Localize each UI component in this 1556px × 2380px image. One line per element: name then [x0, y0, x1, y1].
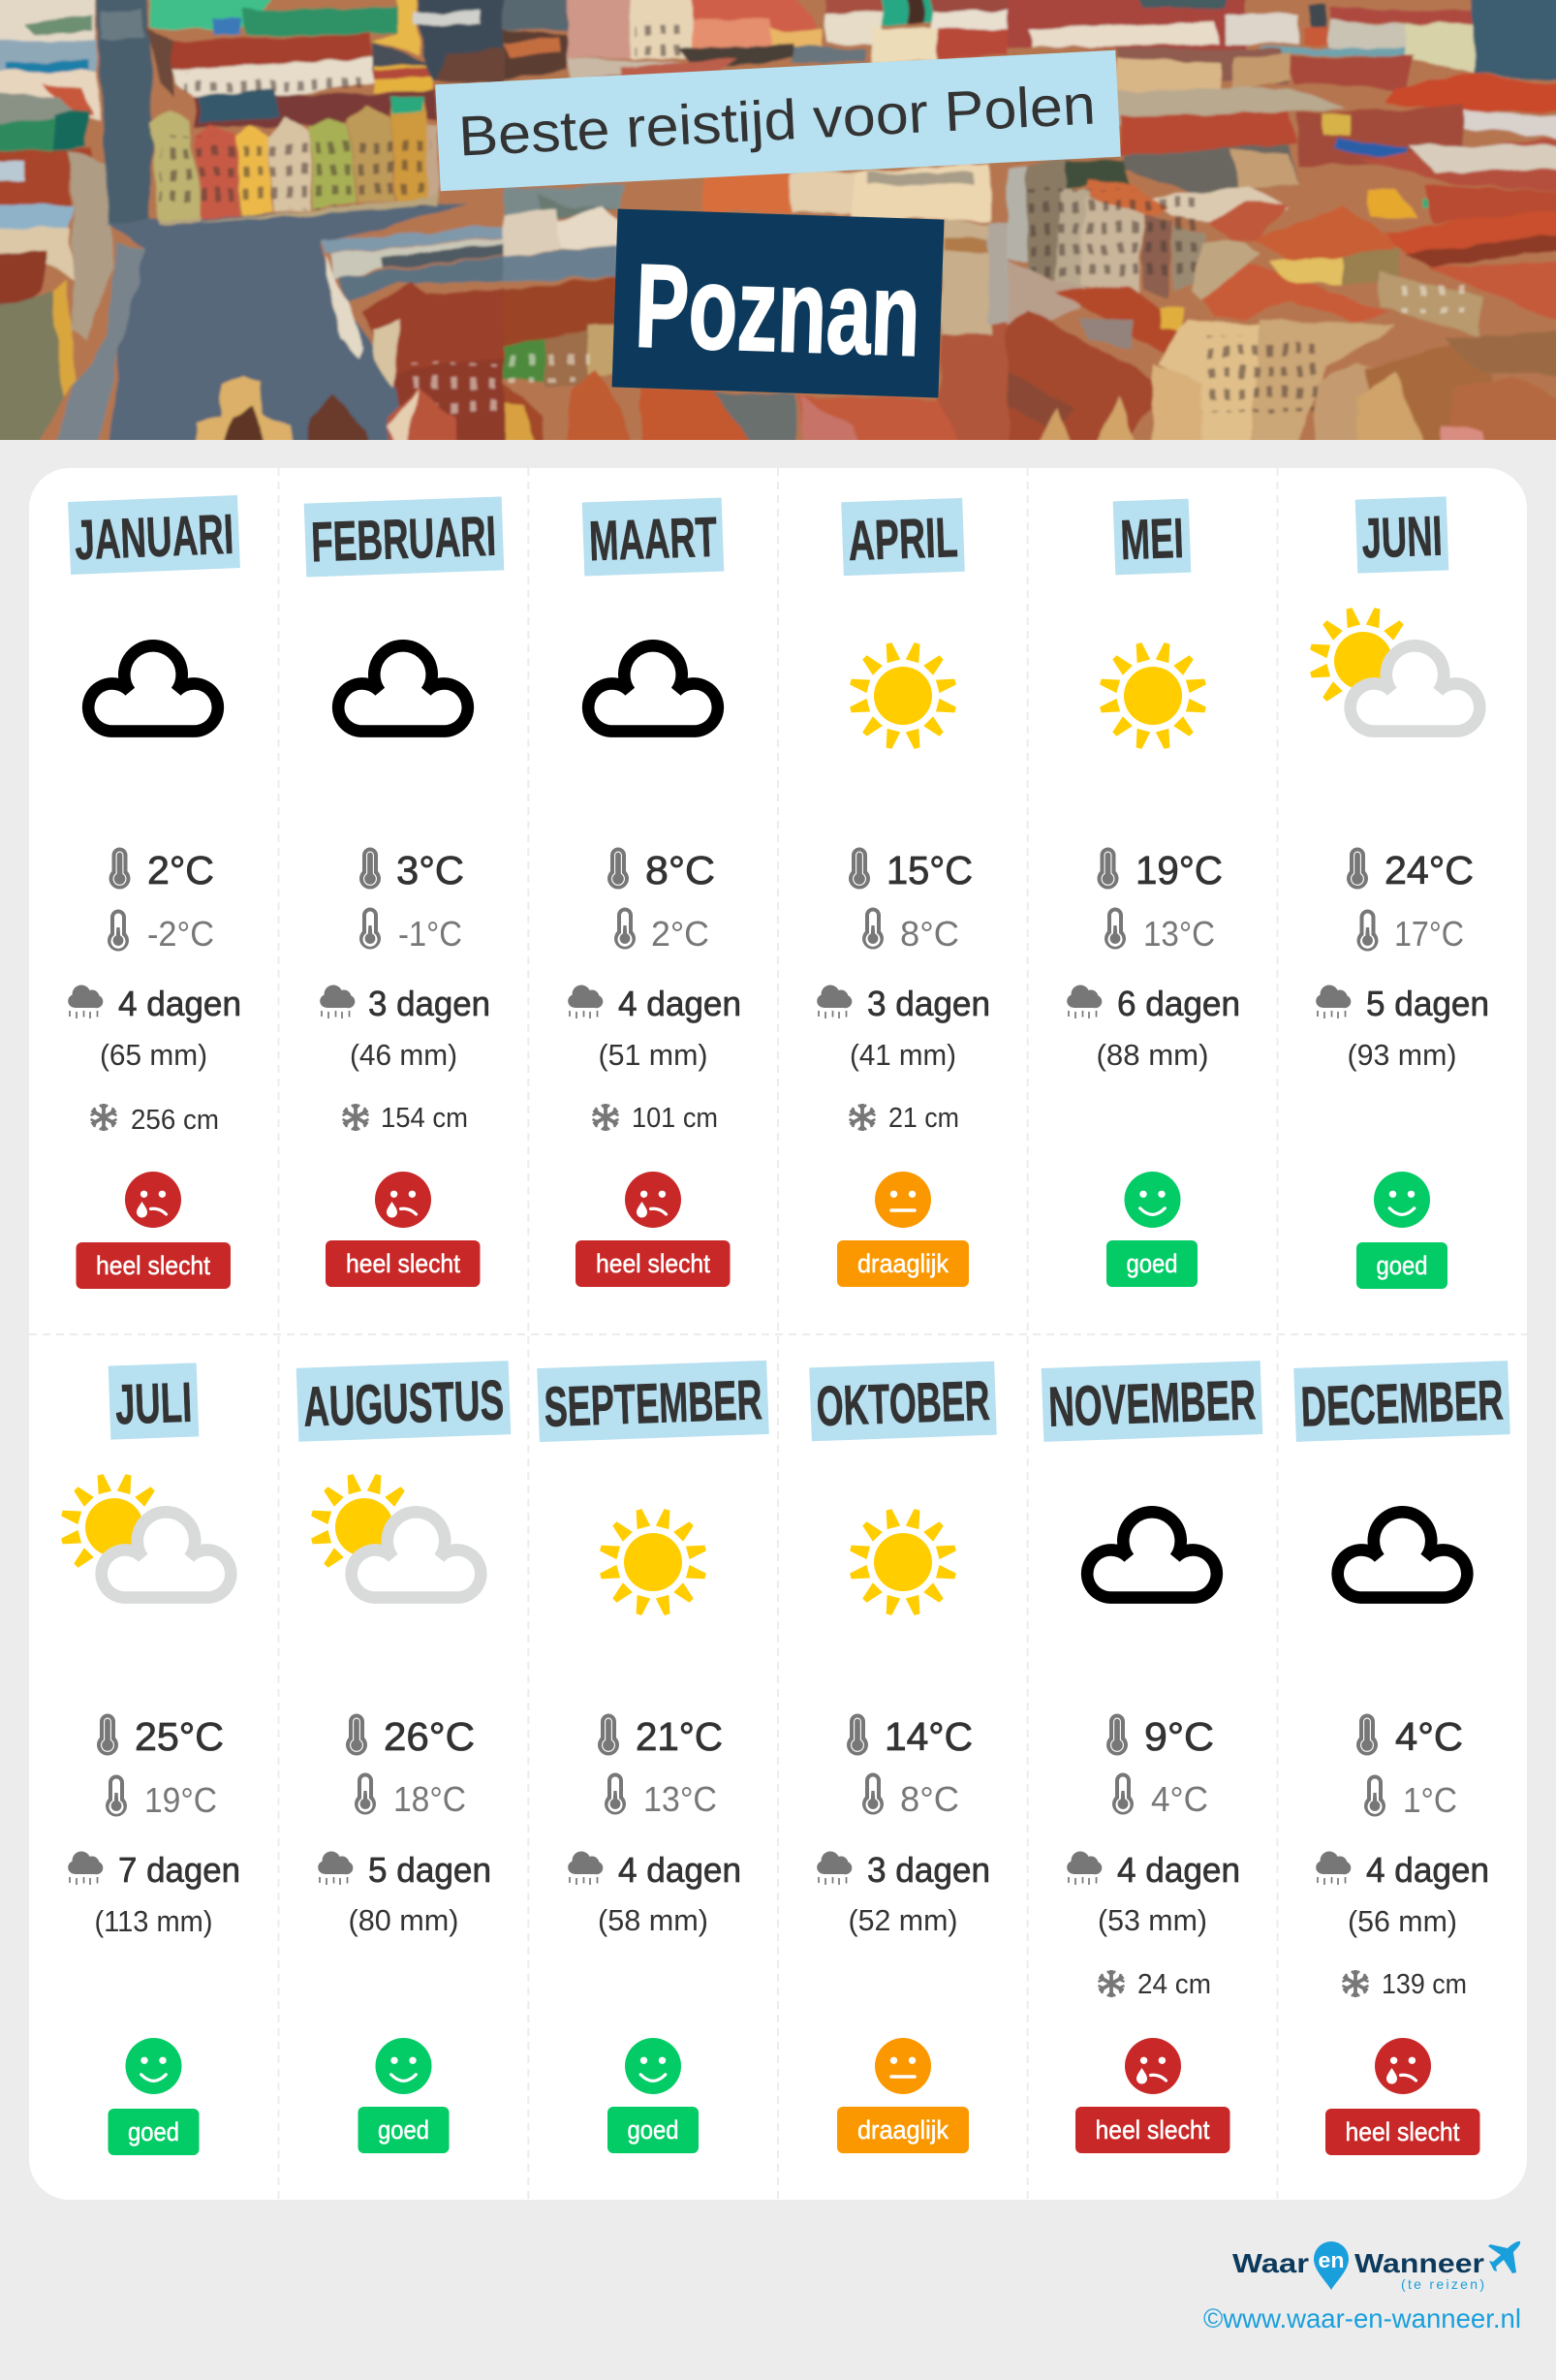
rain days: [1316, 984, 1489, 1023]
snow: [593, 1103, 718, 1134]
rating label: goed: [128, 2117, 179, 2146]
low temperature: [614, 907, 709, 954]
month label: april: [841, 498, 965, 576]
low temperature: 8°C: [900, 914, 959, 954]
month label: januari: JANUARI: [74, 503, 234, 572]
low temperature: [355, 1773, 466, 1819]
second row of months: [60, 1361, 1510, 2155]
rating label: [358, 2107, 450, 2153]
logo: Waar en Wanneer: Waar: [1232, 2248, 1309, 2278]
rain days: 4 dagen: [118, 984, 241, 1023]
high temperature: 9°C: [1144, 1714, 1214, 1759]
rating label: [109, 2109, 200, 2155]
rain amount: (58 mm): [598, 1903, 708, 1937]
rating label: [607, 2107, 699, 2153]
high temperature: 24°C: [1385, 848, 1474, 892]
high temperature: [607, 847, 715, 892]
low temperature: [1364, 1775, 1457, 1820]
icon: partly cloudy: [1309, 607, 1479, 732]
rating face: [875, 1172, 931, 1228]
website url: ©www.waar-en-wanneer.nl: [1203, 2303, 1521, 2333]
month label: oktober: OKTOBER: [816, 1369, 991, 1438]
low temperature: -1°C: [398, 914, 462, 954]
hero photo: aerial view of Poznan old town: [0, 0, 1556, 470]
panel: april: [817, 498, 990, 1287]
month label: mei: [1113, 499, 1191, 575]
rain days: [1316, 1850, 1489, 1890]
icon: cloud: [1087, 1512, 1217, 1598]
icon: map pin: en: [1318, 2248, 1345, 2272]
rating label: heel slecht: [1345, 2117, 1460, 2146]
rain days: [318, 1850, 491, 1890]
rating face: [375, 1172, 431, 1228]
month label: juli: JULI: [114, 1371, 193, 1436]
low temperature: 4°C: [1151, 1779, 1208, 1819]
white calendar card: [29, 468, 1527, 2200]
panel: december: [1293, 1361, 1510, 2155]
icon: cloud: [1338, 1512, 1467, 1598]
icon: cloud: [88, 645, 218, 732]
rating face: [1374, 1172, 1430, 1228]
high temperature: 4°C: [1395, 1714, 1463, 1759]
icon: partly cloudy: [60, 1473, 231, 1598]
high temperature: [598, 1713, 723, 1759]
low temperature: 18°C: [393, 1779, 466, 1819]
high temperature: 14°C: [885, 1714, 973, 1759]
rain days: 4 dagen: [1366, 1850, 1489, 1890]
rating label: goed: [1126, 1249, 1178, 1278]
snow: 154 cm: [381, 1103, 468, 1134]
rating label: draaglijk: [857, 2115, 949, 2145]
rain days: [1067, 1850, 1240, 1890]
high temperature: [1347, 847, 1474, 892]
rating face: [125, 1172, 181, 1228]
month label: augustus: [296, 1361, 511, 1442]
logo: Waar en Wanneer: [1232, 2241, 1520, 2292]
high temperature: 15°C: [887, 848, 973, 892]
panel: november: [1042, 1361, 1262, 2153]
rain amount: (46 mm): [350, 1038, 457, 1072]
snow: [91, 1104, 219, 1136]
panel: juni: [1309, 496, 1489, 1289]
rating face: [376, 2038, 432, 2094]
rain amount: (88 mm): [1097, 1038, 1209, 1072]
low temperature: [359, 907, 462, 954]
low temperature: [1105, 907, 1215, 954]
snow: [849, 1103, 959, 1134]
low temperature: [862, 1773, 959, 1819]
month label: juni: JUNI: [1360, 505, 1444, 570]
month label: november: NOVEMBER: [1047, 1368, 1257, 1439]
rain amount: (93 mm): [1347, 1038, 1457, 1072]
rain days: [1067, 984, 1240, 1023]
icon: airplane: [1488, 2241, 1520, 2273]
rating face: [126, 2038, 182, 2094]
high temperature: 21°C: [636, 1714, 723, 1759]
snow: [1343, 1969, 1467, 2000]
rating label: [1325, 2109, 1480, 2155]
rating label: [1075, 2107, 1230, 2153]
low temperature: [108, 909, 214, 954]
month label: maart: MAART: [588, 506, 718, 573]
month label: september: [537, 1361, 769, 1442]
snow: 21 cm: [888, 1103, 959, 1134]
rating label: heel slecht: [596, 1249, 710, 1278]
rating label: heel slecht: [96, 1251, 210, 1280]
panel: maart: [568, 498, 741, 1287]
rating face: [1124, 1172, 1180, 1228]
rain amount: (52 mm): [849, 1903, 957, 1937]
rain days: 7 dagen: [118, 1850, 240, 1890]
rain days: [817, 1850, 990, 1890]
month label: juli: [109, 1362, 199, 1440]
month label: februari: FEBRUARI: [310, 505, 497, 574]
high temperature: [1106, 1713, 1214, 1759]
logo: Waar en Wanneer: (te reizen): [1401, 2276, 1484, 2292]
rating face: [1125, 2038, 1181, 2094]
low temperature: [605, 1773, 717, 1819]
month label: juni: [1355, 496, 1448, 574]
high temperature: [97, 1713, 224, 1759]
icon: partly cloudy: [310, 1473, 481, 1598]
month label: april: APRIL: [847, 506, 959, 573]
low temperature: [862, 907, 959, 954]
month label: november: [1042, 1361, 1262, 1442]
city name banner: Poznan: [612, 208, 944, 398]
low temperature: -2°C: [147, 914, 214, 954]
rain days: 6 dagen: [1117, 984, 1240, 1023]
rain days: [817, 984, 990, 1023]
rating label: [1356, 1242, 1447, 1289]
panel: februari: [304, 496, 504, 1287]
panel: augustus: [296, 1361, 511, 2153]
high temperature: 8°C: [645, 848, 715, 892]
rain days: [68, 984, 241, 1023]
rating label: heel slecht: [1095, 2115, 1210, 2145]
rating label: [326, 1240, 481, 1287]
rain amount: (51 mm): [599, 1038, 707, 1072]
panel: juli: [60, 1362, 240, 2155]
high temperature: [359, 847, 464, 892]
panel: januari: [68, 495, 241, 1289]
snow: [343, 1103, 468, 1134]
low temperature: [1112, 1773, 1208, 1819]
rating label: [837, 1240, 969, 1287]
rating label: [1106, 1240, 1198, 1287]
rain amount: (80 mm): [349, 1903, 459, 1937]
high temperature: 25°C: [135, 1714, 224, 1759]
low temperature: 19°C: [144, 1780, 217, 1820]
snow: 101 cm: [632, 1103, 718, 1134]
low temperature: 1°C: [1403, 1780, 1457, 1820]
month label: september: SEPTEMBER: [544, 1368, 763, 1439]
rain days: [68, 1850, 240, 1890]
icon: cloud: [588, 645, 718, 732]
low temperature: 13°C: [643, 1779, 717, 1819]
low temperature: 2°C: [651, 914, 709, 954]
rain days: 3 dagen: [867, 984, 990, 1023]
snow: 24 cm: [1137, 1969, 1211, 2000]
rain days: 4 dagen: [1117, 1850, 1240, 1890]
high temperature: 26°C: [384, 1714, 475, 1759]
low temperature: [106, 1775, 217, 1820]
city name banner: Poznan: Poznan: [634, 239, 922, 381]
rating face: [625, 1172, 681, 1228]
rain days: [568, 1850, 741, 1890]
month label: augustus: AUGUSTUS: [302, 1368, 505, 1439]
rating face: [875, 2038, 931, 2094]
rain amount: (65 mm): [100, 1038, 207, 1072]
rating label: goed: [378, 2115, 429, 2145]
panel: oktober: [809, 1362, 997, 2153]
month label: mei: MEI: [1119, 507, 1185, 572]
high temperature: [1356, 1713, 1463, 1759]
rating label: [837, 2107, 969, 2153]
high temperature: [847, 1713, 973, 1759]
rain amount: (41 mm): [850, 1038, 956, 1072]
low temperature: 17°C: [1394, 914, 1464, 954]
rating label: [76, 1242, 231, 1289]
rating face: [1375, 2038, 1431, 2094]
rating label: [576, 1240, 731, 1287]
month label: februari: [304, 496, 504, 578]
rain amount: (113 mm): [95, 1904, 213, 1938]
month label: januari: [68, 495, 240, 575]
icon: sun: [599, 1508, 707, 1616]
high temperature: 19°C: [1136, 848, 1223, 892]
rain days: 5 dagen: [1366, 984, 1489, 1023]
panel: september: [537, 1361, 769, 2153]
low temperature: 8°C: [900, 1779, 959, 1819]
rating label: heel slecht: [346, 1249, 460, 1278]
rating label: draaglijk: [857, 1249, 949, 1278]
snow: 256 cm: [131, 1105, 219, 1136]
month label: oktober: [809, 1362, 997, 1441]
icon: cloud: [338, 645, 468, 732]
rating label: goed: [628, 2115, 678, 2145]
rain days: [568, 984, 741, 1023]
low temperature: [1356, 909, 1464, 954]
title banner: Beste reistijd voor Polen: [457, 73, 1097, 169]
rain amount: (56 mm): [1348, 1904, 1457, 1938]
rain amount: (53 mm): [1098, 1903, 1207, 1937]
high temperature: [849, 847, 973, 892]
logo: Waar en Wanneer: Wanneer: [1354, 2248, 1484, 2278]
high temperature: 2°C: [147, 848, 214, 892]
rain days: 5 dagen: [368, 1850, 491, 1890]
high temperature: [109, 847, 214, 892]
icon: sun: [1099, 642, 1207, 750]
panel: mei: [1067, 499, 1240, 1287]
rain days: 3 dagen: [368, 984, 490, 1023]
icon: sun: [849, 642, 957, 750]
rating face: [625, 2038, 681, 2094]
snow: 139 cm: [1382, 1969, 1467, 2000]
rain days: 4 dagen: [618, 1850, 741, 1890]
title banner: [435, 50, 1121, 191]
icon: sun: [849, 1508, 957, 1616]
high temperature: 3°C: [396, 848, 464, 892]
month label: maart: [582, 498, 724, 576]
low temperature: 13°C: [1143, 914, 1215, 954]
rating label: goed: [1376, 1251, 1428, 1280]
high temperature: [346, 1713, 475, 1759]
high temperature: [1097, 847, 1223, 892]
rain days: 4 dagen: [618, 984, 741, 1023]
rain days: 3 dagen: [867, 1850, 990, 1890]
snow: [1099, 1969, 1211, 2000]
icon: map pin: [1314, 2241, 1349, 2290]
